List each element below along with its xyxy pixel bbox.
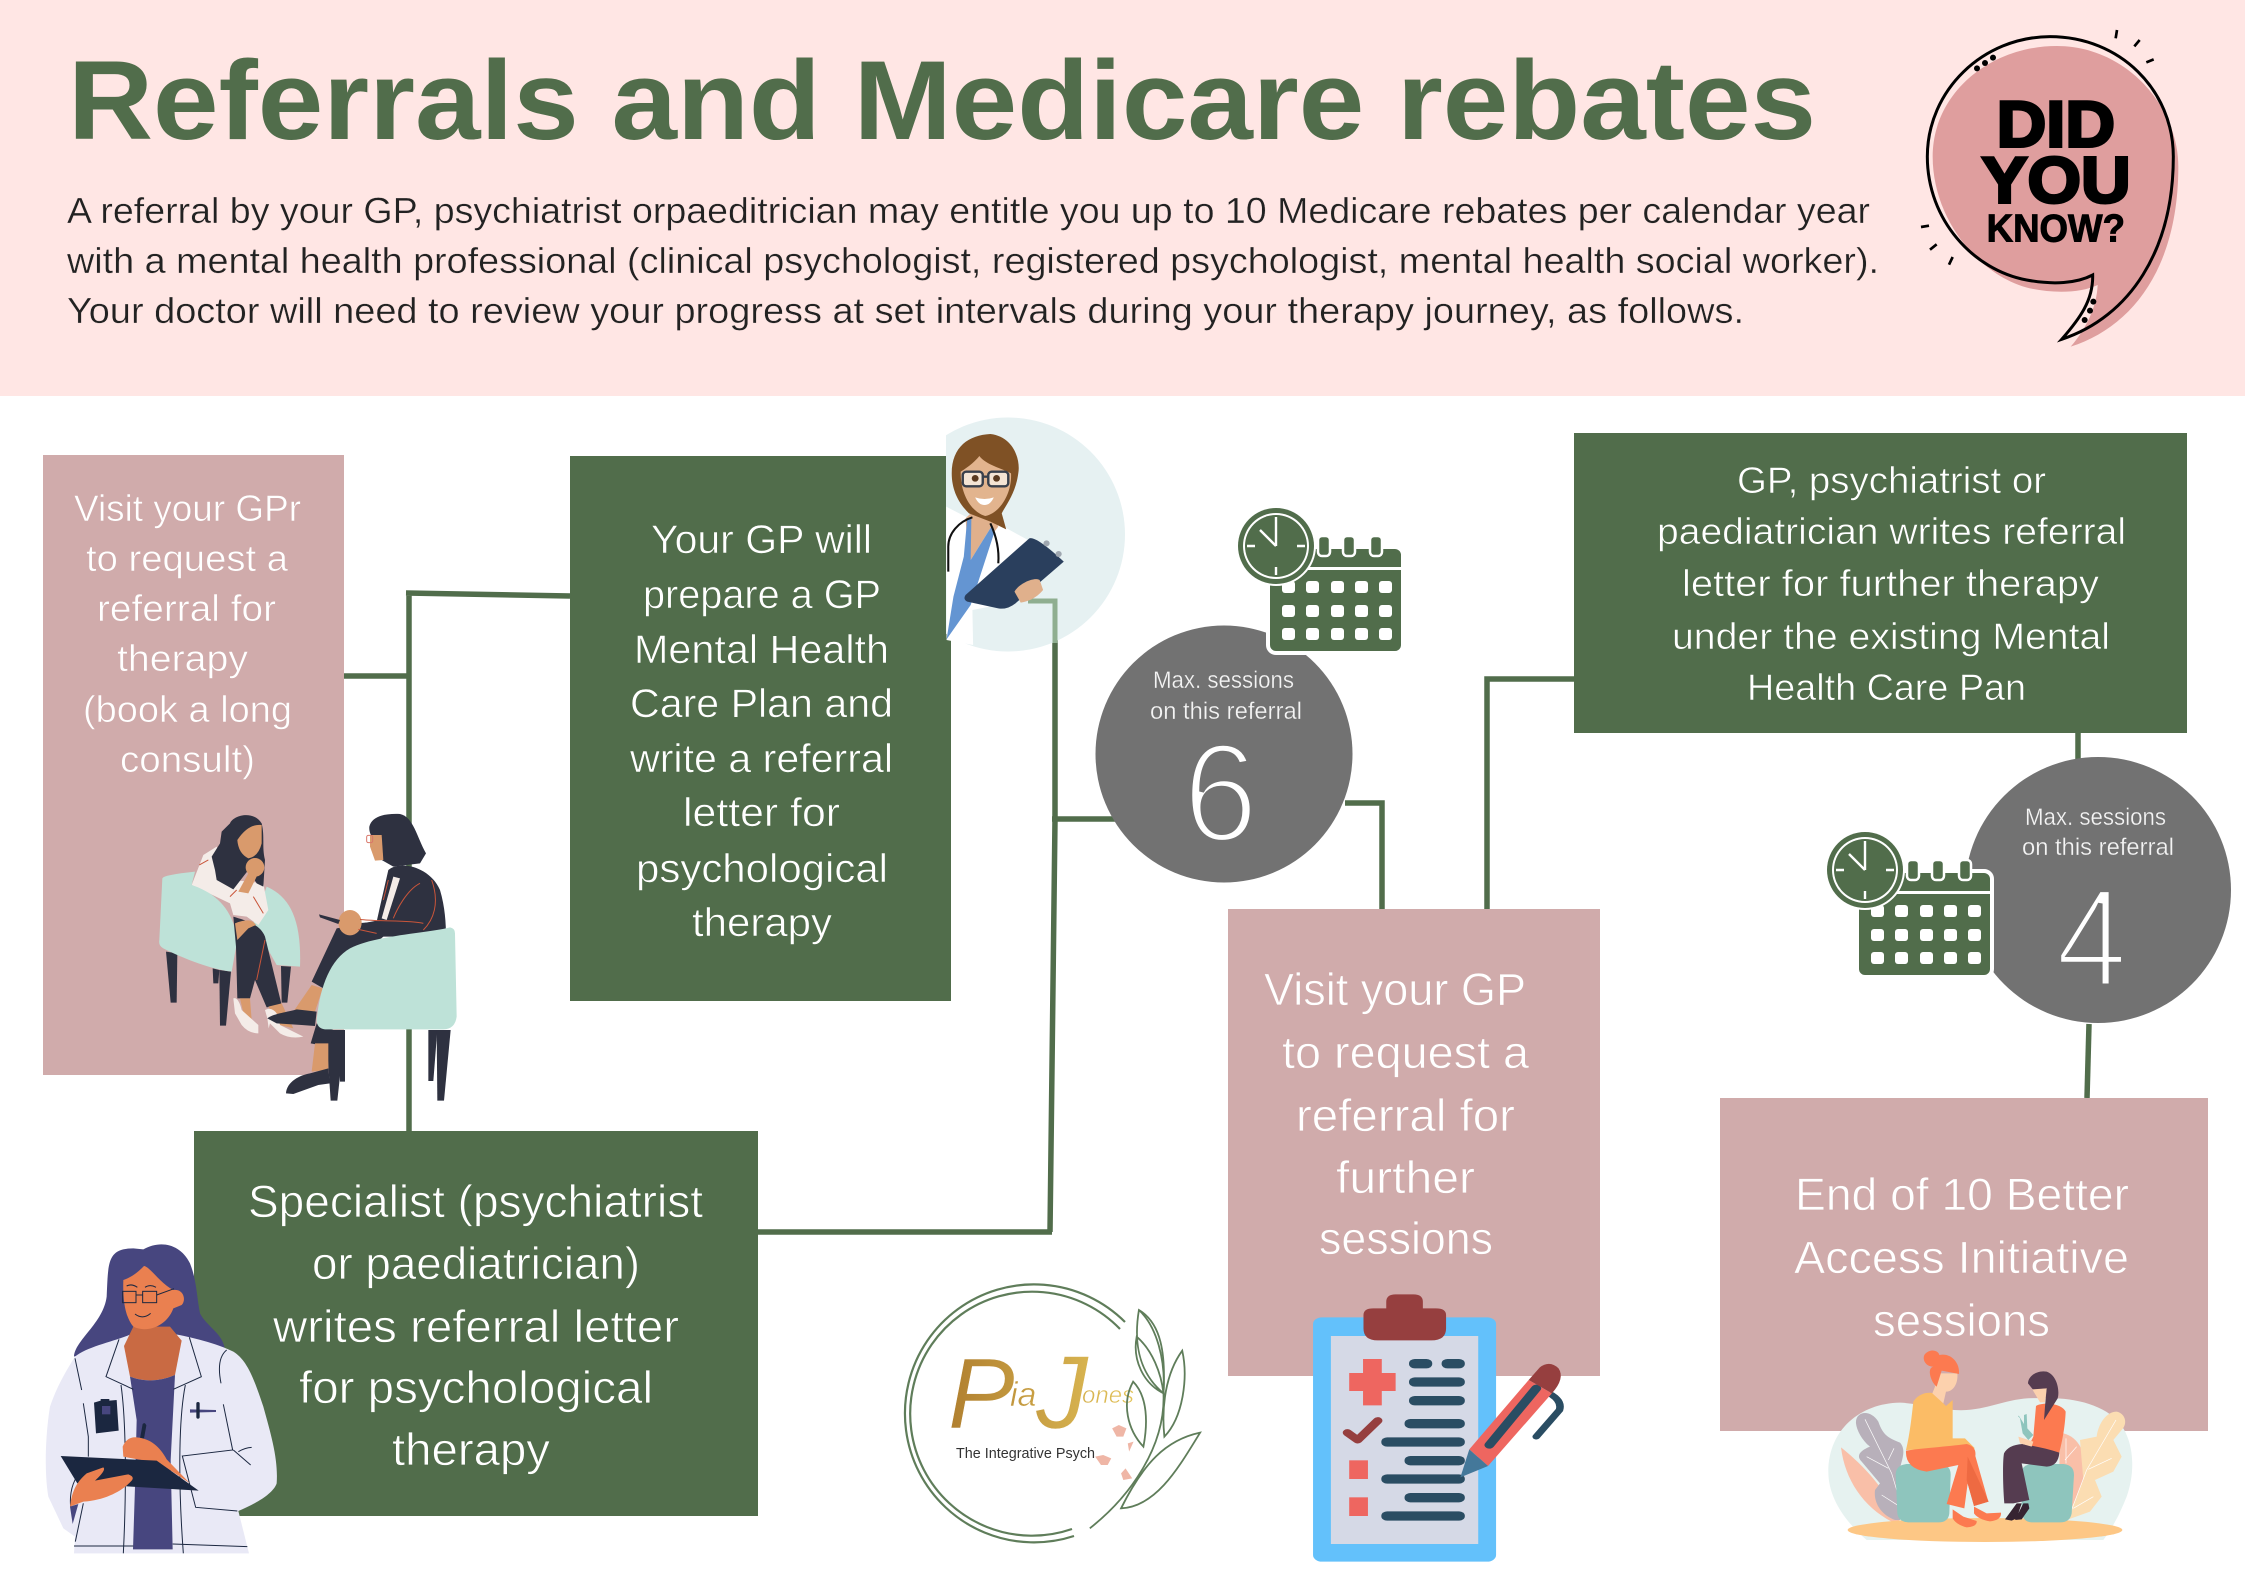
panel: GP mental health care plan: letter for xyxy=(683,791,840,835)
panel: end of sessions: Access Initiative xyxy=(1794,1232,2129,1283)
logo: Pia Jones The Integrative Psych: ones xyxy=(1082,1382,1134,1409)
header band xyxy=(0,0,2245,396)
badge: max sessions 4 xyxy=(1965,757,2231,1023)
icon: clock and calendar (6 sessions) xyxy=(1236,506,1405,653)
panel: visit GP for further sessions: referral for xyxy=(1296,1090,1515,1141)
logo: Pia Jones The Integrative Psych: The Integrative Psych xyxy=(956,1445,1095,1462)
illustration: GP with clipboard xyxy=(946,418,1125,652)
illustration: two people talking in armchairs xyxy=(159,814,457,1101)
panel: visit your GP: referral for xyxy=(97,588,276,629)
panel: GP mental health care plan: Mental Health xyxy=(634,628,889,672)
title: Referrals and Medicare rebates xyxy=(68,38,1816,163)
badge: max sessions 6 xyxy=(1096,626,1352,882)
panel: visit your GP: (book a long xyxy=(83,689,292,730)
panel: visit GP for further sessions: further xyxy=(1336,1152,1475,1203)
speech bubble: did you know: DID xyxy=(1997,88,2115,161)
panel: end of sessions: sessions xyxy=(1873,1295,2050,1346)
speech bubble: did you know xyxy=(1921,30,2178,347)
panel: visit your GP: therapy xyxy=(117,638,249,679)
logo: Pia Jones The Integrative Psych: P xyxy=(948,1338,1015,1450)
panel: further therapy referral letter: under the existing Mental xyxy=(1672,616,2110,657)
badge: max sessions 4: Max. sessions xyxy=(2025,804,2166,831)
panel: visit your GP: to request a xyxy=(86,538,288,579)
speech bubble: did you know: YOU xyxy=(1982,143,2131,216)
panel: specialist referral: writes referral letter xyxy=(272,1301,679,1352)
panel: further therapy referral letter xyxy=(1574,433,2187,733)
panel: further therapy referral letter: letter for further therapy xyxy=(1682,563,2100,604)
panel: visit GP for further sessions: sessions xyxy=(1319,1213,1493,1264)
panel: visit GP for further sessions: to request a xyxy=(1282,1027,1530,1078)
panel: end of sessions xyxy=(1720,1098,2208,1431)
panel: end of sessions: End of 10 Better xyxy=(1795,1169,2129,1220)
panel: visit GP for further sessions xyxy=(1228,909,1600,1376)
badge: max sessions 6: 6 xyxy=(1183,714,1258,871)
intro text block: with a mental health professional (clinical psychologist, registered psychologist, mental health social worker). xyxy=(66,240,1879,281)
badge: max sessions 6: Max. sessions xyxy=(1153,667,1294,694)
panel: further therapy referral letter: Health Care Pan xyxy=(1747,667,2026,708)
panel: further therapy referral letter: GP, psychiatrist or xyxy=(1737,460,2046,501)
panel: GP mental health care plan: psychological xyxy=(636,847,888,891)
panel: specialist referral xyxy=(194,1131,758,1516)
panel: further therapy referral letter: paediatrician writes referral xyxy=(1657,511,2126,552)
panel: GP mental health care plan: Your GP will xyxy=(651,518,872,562)
panel: specialist referral: or paediatrician) xyxy=(312,1238,640,1289)
logo: Pia Jones The Integrative Psych: J xyxy=(1035,1335,1089,1451)
badge: max sessions 4: 4 xyxy=(2056,859,2127,1016)
illustration: doctor in white coat xyxy=(46,1244,277,1553)
panel: specialist referral: Specialist (psychiatrist xyxy=(248,1176,703,1227)
panel: GP mental health care plan xyxy=(570,456,951,1001)
badge: max sessions 4: on this referral xyxy=(2022,834,2174,861)
panel: GP mental health care plan: therapy xyxy=(692,901,832,945)
panel: GP mental health care plan: write a referral xyxy=(629,737,893,781)
panel: visit your GP: consult) xyxy=(120,739,255,780)
intro text block: Your doctor will need to review your progress at set intervals during your therapy journey, as follows. xyxy=(67,290,1744,331)
icon: clock and calendar (4 sessions) xyxy=(1825,830,1994,977)
connector lines xyxy=(344,593,2089,1232)
panel: visit your GP xyxy=(43,455,344,1075)
panel: specialist referral: therapy xyxy=(392,1424,551,1475)
panel: specialist referral: for psychological xyxy=(299,1362,653,1413)
panel: GP mental health care plan: prepare a GP xyxy=(643,573,881,617)
panel: visit your GP: Visit your GPr xyxy=(74,488,301,529)
panel: visit GP for further sessions: Visit your GP xyxy=(1264,964,1526,1015)
speech bubble: did you know: KNOW? xyxy=(1987,207,2125,251)
intro text block xyxy=(66,190,1879,331)
logo: Pia Jones The Integrative Psych xyxy=(905,1284,1200,1542)
intro text block: A referral by your GP, psychiatrist orpaeditrician may entitle you up to 10 Medicare rebates per calendar year xyxy=(67,190,1870,231)
illustration: two women talking on poufs xyxy=(1828,1350,2132,1542)
panel: GP mental health care plan: Care Plan and xyxy=(630,682,893,726)
illustration: clipboard with checklist and pen xyxy=(1313,1294,1561,1562)
badge: max sessions 6: on this referral xyxy=(1150,698,1302,725)
logo: Pia Jones The Integrative Psych: ia xyxy=(1010,1376,1036,1414)
